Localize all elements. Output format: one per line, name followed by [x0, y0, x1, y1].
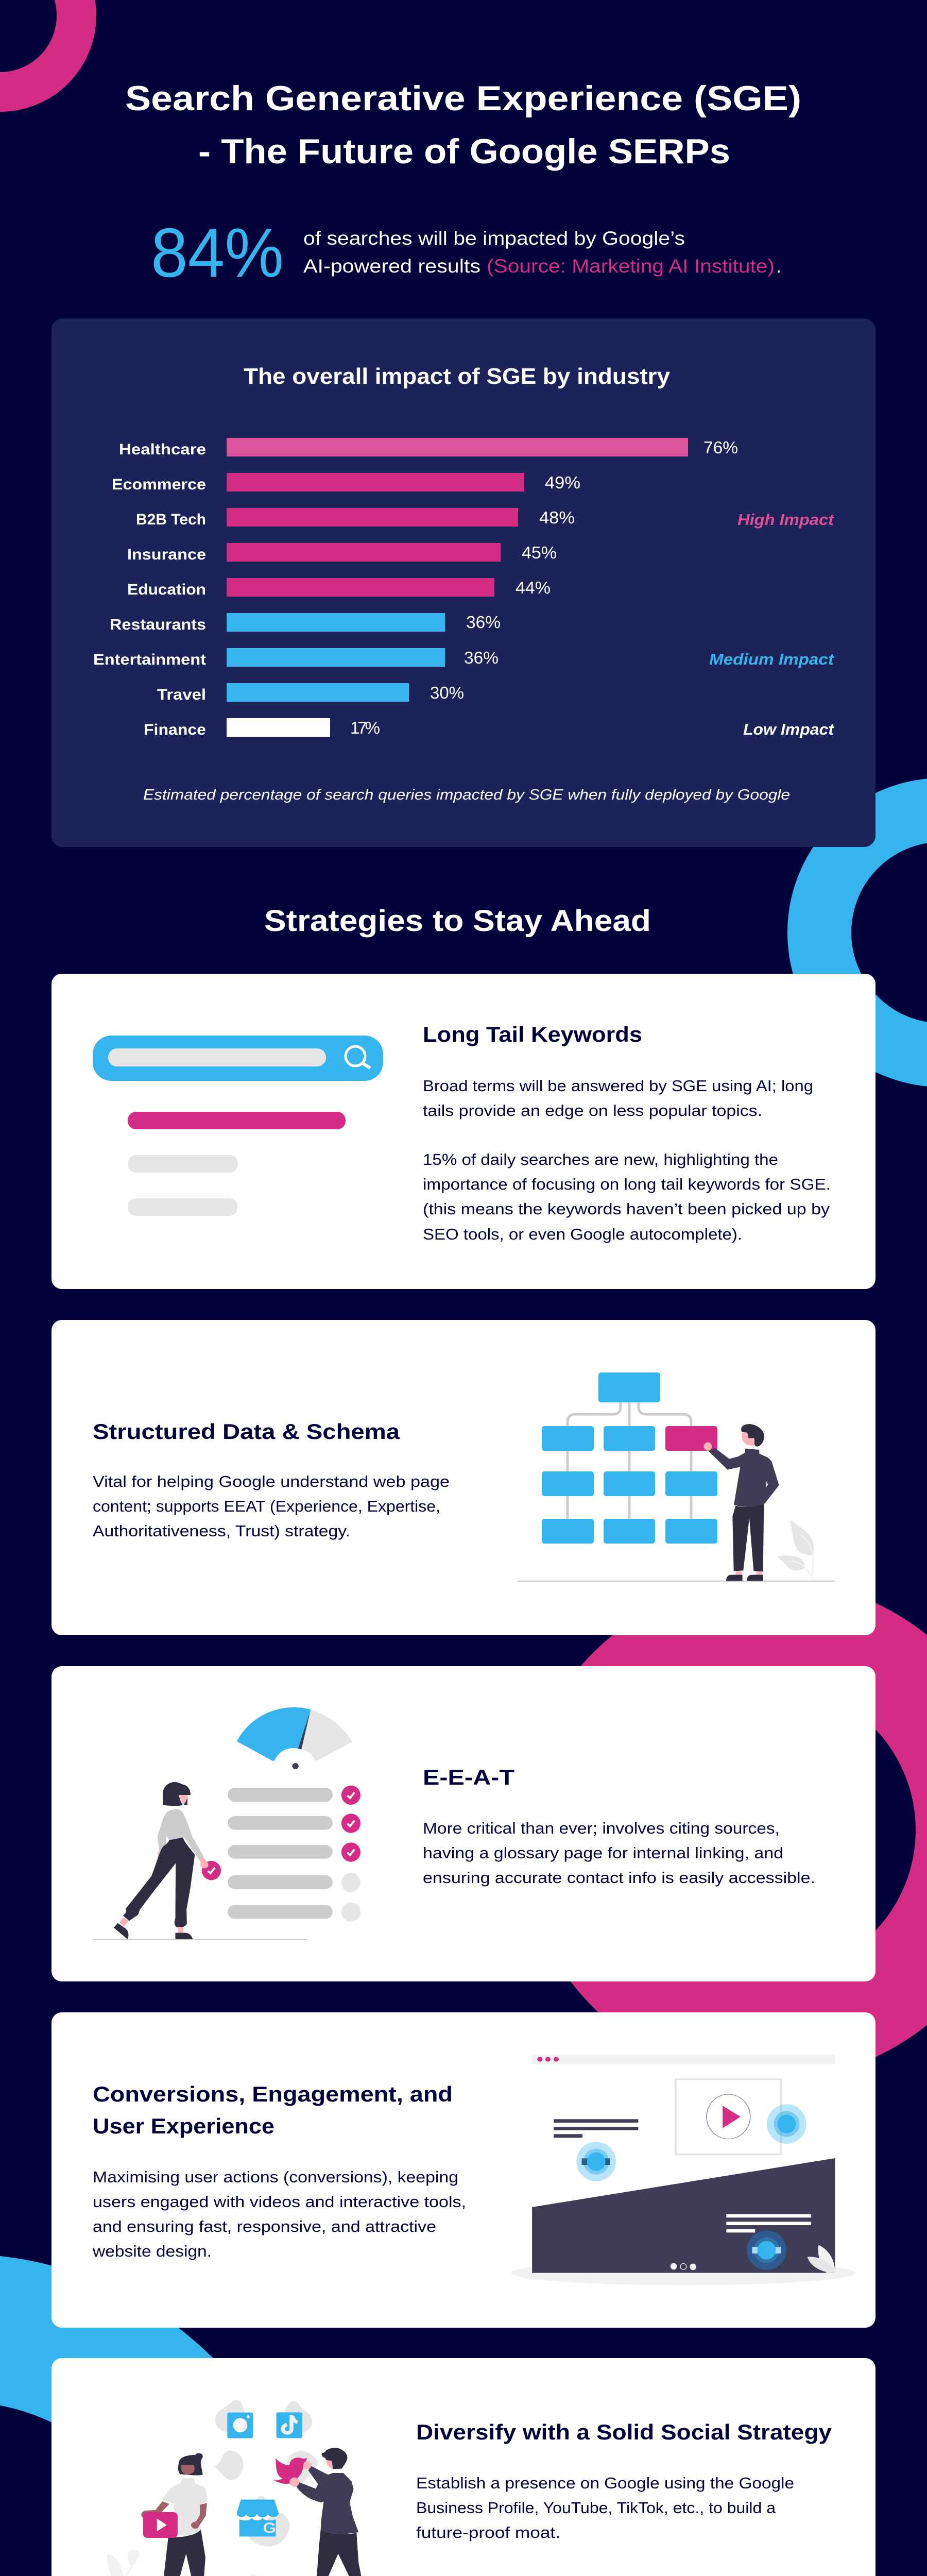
legend: high impact: High Impact	[737, 511, 835, 529]
text block: website design.	[92, 2242, 212, 2260]
text block: having a glossary page for internal linking, and	[423, 1844, 783, 1862]
bar: Travel 30%	[157, 683, 464, 703]
text block	[416, 2474, 811, 2576]
bar: Insurance 45%	[127, 543, 557, 563]
bar: Restaurants 36%: 36%	[466, 613, 501, 632]
legend: medium impact: Medium Impact	[709, 650, 835, 668]
text block: Maximising user actions (conversions), keeping	[93, 2168, 458, 2186]
stat description: of searches will be impacted by Google’s	[303, 228, 685, 249]
text block	[93, 1472, 450, 1540]
text block	[423, 1077, 831, 1243]
heading: Diversify with a Solid Social Strategy	[416, 2420, 832, 2444]
text block: 15% of daily searches are new, highlighting the	[423, 1150, 778, 1168]
text block: Authoritativeness, Trust) strategy.	[93, 1522, 350, 1540]
text block: Establish a presence on Google using the Google	[416, 2474, 794, 2492]
bar: Finance 17%	[144, 718, 380, 738]
text block: future-proof moat.	[416, 2523, 560, 2541]
heading: Conversions, Engagement, and	[93, 2082, 453, 2106]
text block: tails provide an edge on less popular topics.	[423, 1101, 762, 1120]
illustration: two people with social icons	[93, 2400, 386, 2576]
bar: Entertainment 36%: 36%	[464, 648, 499, 667]
text block	[423, 1819, 815, 1887]
text block: Broad terms will be answered by SGE using AI; long	[423, 1077, 813, 1095]
icon: Google Business G: G	[263, 2520, 276, 2536]
text block: SEO tools, or even Google autocomplete).	[423, 1225, 742, 1243]
bar: Education 44%: 44%	[516, 578, 551, 597]
stat description: .	[776, 256, 781, 277]
panel: diversify with social strategy	[52, 2358, 876, 2576]
text block	[92, 2168, 466, 2260]
panel: conversions, engagement and UX	[52, 2012, 876, 2328]
heading: Structured Data & Schema	[93, 1419, 400, 1444]
bar: Ecommerce 49%: 49%	[545, 473, 580, 492]
bar: Entertainment 36%: Entertainment	[93, 651, 206, 668]
bar: Education 44%	[127, 578, 551, 598]
text block: users engaged with videos and interactive tools,	[93, 2193, 466, 2211]
title: Search Generative Experience (SGE)	[125, 79, 801, 118]
bar chart	[93, 438, 738, 738]
bar: Healthcare 76%: 76%	[703, 438, 738, 457]
illustration: gauge, checklist and woman	[93, 1707, 360, 1940]
decorative ring: right blue	[819, 810, 927, 1055]
text block: Business Profile, YouTube, TikTok, etc., to build a	[416, 2499, 776, 2517]
chart caption: Estimated percentage of search queries impacted by SGE when fully deployed by Google	[143, 787, 790, 803]
decorative ring: lower-left blue	[0, 2328, 244, 2576]
panel: E-E-A-T	[52, 1666, 876, 1981]
chart heading: The overall impact of SGE by industry	[244, 364, 671, 389]
panel: structured data and schema	[52, 1320, 876, 1635]
text block: (this means the keywords haven’t been picked up by	[423, 1200, 830, 1218]
heading: Long Tail Keywords	[423, 1022, 642, 1046]
panel: impact by industry chart	[52, 318, 876, 847]
bar: B2B Tech 48%: B2B Tech	[136, 511, 206, 528]
decorative ring: top-left pink	[0, 0, 76, 92]
icon: search bar illustration	[93, 1036, 383, 1216]
illustration: site hierarchy with person	[518, 1372, 834, 1581]
bar: Education 44%: Education	[127, 581, 206, 598]
text block: Vital for helping Google understand web page	[93, 1472, 450, 1490]
bar: Travel 30%: Travel	[157, 686, 206, 703]
bar: Healthcare 76%	[119, 438, 738, 458]
decorative ring: right pink	[572, 1632, 927, 2028]
title: - The Future of Google SERPs	[198, 132, 730, 171]
section heading: Strategies to Stay Ahead	[264, 904, 651, 938]
bar: Restaurants 36%	[110, 613, 501, 633]
stat description: AI-powered results	[303, 256, 480, 277]
headline statistic	[151, 214, 781, 292]
bar: Travel 30%: 30%	[430, 683, 464, 702]
bar: Ecommerce 49%: Ecommerce	[112, 476, 206, 493]
bar: Insurance 45%: Insurance	[127, 546, 206, 563]
illustration: web page mock-up	[511, 2055, 856, 2285]
bar: B2B Tech 48%	[136, 508, 575, 528]
panel: long tail keywords	[52, 974, 876, 1289]
text block: ensuring accurate contact info is easily accessible.	[423, 1869, 815, 1887]
bar: Insurance 45%: 45%	[522, 543, 557, 562]
bar: Finance 17%: Finance	[144, 721, 206, 738]
bar: Restaurants 36%: Restaurants	[110, 616, 206, 633]
bar: B2B Tech 48%: 48%	[539, 508, 575, 527]
text block: More critical than ever; involves citing sources,	[423, 1819, 780, 1837]
bar: Healthcare 76%: Healthcare	[119, 441, 206, 458]
bar: Finance 17%: 17%	[350, 718, 380, 737]
bar: Ecommerce 49%	[112, 473, 580, 493]
heading	[93, 2082, 453, 2138]
heading: E-E-A-T	[423, 1765, 514, 1789]
title	[125, 79, 801, 171]
stat number: 84%	[151, 214, 284, 292]
stat description: (Source: Marketing AI Institute)	[487, 256, 775, 277]
bar: Entertainment 36%	[93, 648, 499, 668]
heading: User Experience	[93, 2114, 274, 2138]
text block: and ensuring fast, responsive, and attractive	[93, 2217, 436, 2235]
legend: low impact: Low Impact	[743, 720, 835, 738]
text block: content; supports EEAT (Experience, Expertise,	[93, 1497, 440, 1515]
text block: importance of focusing on long tail keywords for SGE.	[423, 1175, 831, 1193]
stat description	[303, 228, 781, 277]
